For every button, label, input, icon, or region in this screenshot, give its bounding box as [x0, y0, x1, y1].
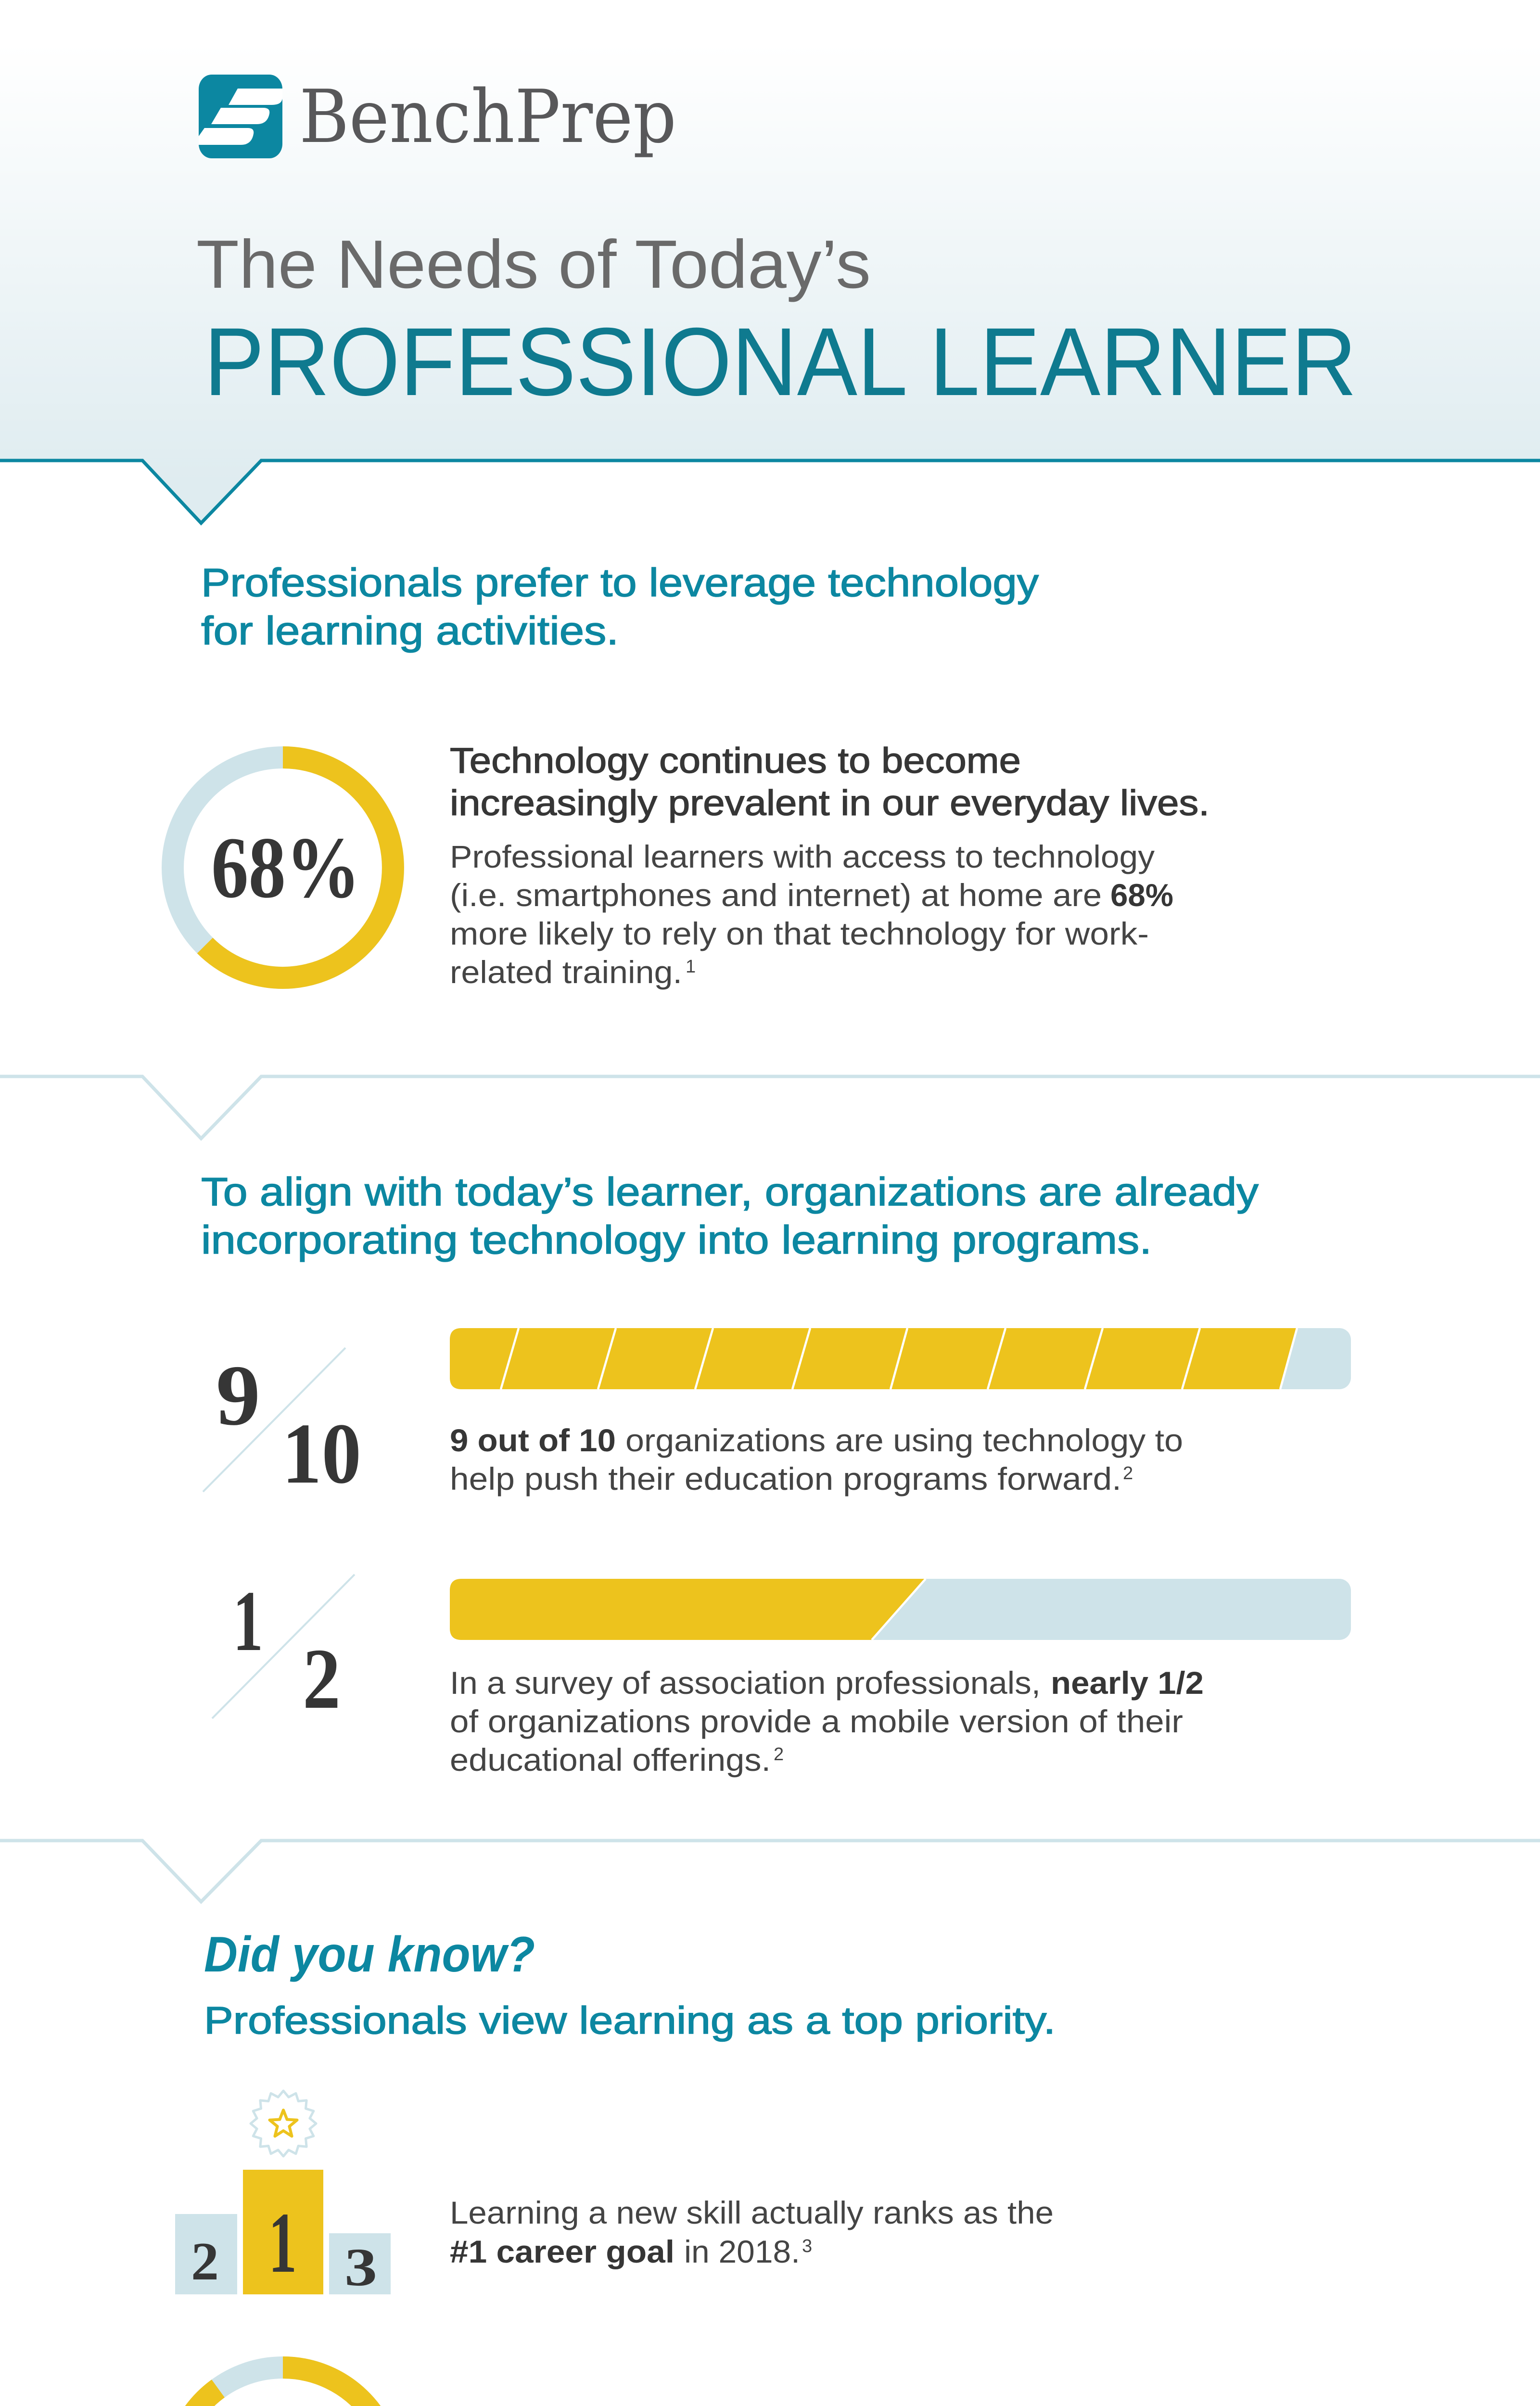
text block: nearly one half: of organizations provide a mobile version of their	[450, 1703, 1183, 1739]
heading: section 2: incorporating technology into learning programs.	[201, 1217, 1152, 1262]
fraction: 1/2: 2	[303, 1631, 341, 1727]
heading: section 2	[201, 1169, 1259, 1262]
bar chart: 9 out of 10	[450, 1328, 1351, 1389]
text block: technology prevalence: 68%	[1110, 877, 1173, 913]
text block: technology prevalence: Professional learners with access to technology	[450, 839, 1155, 874]
donut chart: 68%: 68%	[211, 819, 360, 916]
bar chart: nearly one half	[450, 1579, 1351, 1640]
heading: did you know: Professionals view learning as a top priority.	[204, 1999, 1056, 2042]
text block: technology prevalence: more likely to rely on that technology for work-	[450, 916, 1149, 951]
text block: nearly one half: 2	[774, 1744, 784, 1765]
text block: nearly one half: educational offerings.	[450, 1742, 771, 1778]
logo: BenchPrep: BenchPrep	[299, 74, 676, 159]
donut chart: 90%	[173, 2368, 393, 2406]
icon: podium with star badge: 3	[344, 2238, 377, 2297]
text block: technology prevalence: (i.e. smartphones and internet) at home are	[450, 877, 1102, 913]
text block: 9 out of 10: organizations are using technology to	[625, 1422, 1183, 1458]
text block: technology prevalence	[450, 741, 1209, 990]
heading: section 1: for learning activities.	[201, 608, 619, 653]
text block: technology prevalence: 1	[686, 957, 696, 977]
text block: 9 out of 10: help push their education programs forward.	[450, 1461, 1121, 1497]
text block: technology prevalence: related training.	[450, 954, 682, 990]
icon: podium with star badge: 1	[268, 2195, 297, 2291]
heading: did you know	[204, 1927, 1056, 2042]
heading: section 2: To align with today’s learner, organizations are already	[201, 1169, 1259, 1214]
text block: technology prevalence: increasingly prevalent in our everyday lives.	[450, 783, 1209, 823]
title	[196, 226, 1357, 416]
text block: 9 out of 10: 2	[1123, 1463, 1133, 1484]
icon: podium with star badge: 2	[191, 2232, 219, 2291]
text block: career goal: 3	[802, 2236, 812, 2256]
text block: technology prevalence: Technology continues to become	[450, 741, 1021, 781]
icon: podium with star badge	[175, 2091, 391, 2297]
text block: nearly one half: In a survey of association professionals,	[450, 1665, 1041, 1701]
title: The Needs of Today’s	[196, 226, 871, 303]
text block: career goal	[450, 2195, 1054, 2269]
text block: career goal: in 2018.	[684, 2234, 800, 2269]
fraction: 9/10: 10	[282, 1406, 361, 1501]
fraction: 1/2	[212, 1573, 355, 1727]
fraction: 9/10	[203, 1347, 361, 1501]
title: PROFESSIONAL LEARNER	[204, 307, 1357, 416]
heading: section 1	[201, 560, 1039, 653]
text block: 9 out of 10	[450, 1422, 1183, 1497]
fraction: 1/2: 1	[233, 1573, 263, 1669]
text block: nearly one half	[450, 1665, 1204, 1778]
fraction: 9/10: 9	[216, 1347, 260, 1443]
text block: career goal: #1 career goal	[450, 2234, 675, 2269]
heading: did you know: Did you know?	[204, 1927, 535, 1983]
text block: nearly one half: nearly 1/2	[1051, 1665, 1204, 1701]
panel: header	[0, 0, 1540, 523]
text block: 9 out of 10: 9 out of 10	[450, 1422, 616, 1458]
donut chart: 68%	[173, 757, 393, 978]
text block: career goal: Learning a new skill actually ranks as the	[450, 2195, 1054, 2230]
heading: section 1: Professionals prefer to leverage technology	[201, 560, 1039, 605]
